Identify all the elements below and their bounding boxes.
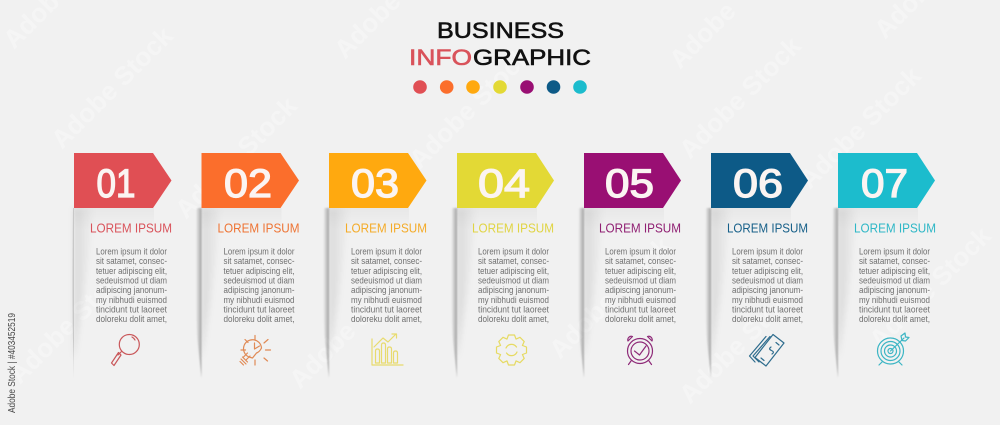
title: BUSINESS (437, 18, 564, 43)
body text 04: my nibhudi euismod (478, 295, 549, 306)
body text 07: Lorem ipsum it dolor (859, 246, 930, 258)
body text 05 (605, 246, 676, 325)
heading 01: LOREM IPSUM (90, 220, 172, 236)
title: GRAPHIC (473, 45, 591, 70)
icon: gear (496, 335, 526, 365)
body text 07: sit satamet, consec- (859, 256, 930, 267)
panel: step 03 (323, 153, 427, 378)
body text 02: my nibhudi euismod (224, 295, 294, 306)
heading 04: LOREM IPSUM (472, 220, 554, 236)
body text 04: tetuer adipiscing elit, (478, 266, 549, 277)
body text 06: sedeuismod ut diam (732, 276, 803, 286)
body text 06 (732, 246, 803, 325)
body text 04: sedeuismod ut diam (478, 276, 549, 286)
body text 03: sedeuismod ut diam (351, 276, 422, 286)
heading 02: LOREM IPSUM (218, 220, 300, 236)
title: INFO (409, 45, 472, 70)
watermark pattern: Adobe Stock (283, 260, 417, 394)
panel: step 01 (72, 153, 172, 378)
heading 05: LOREM IPSUM (599, 220, 681, 236)
heading 06: LOREM IPSUM (727, 220, 808, 236)
body text 05: tincidunt tut laoreet (605, 304, 676, 316)
body text 07: tetuer adipiscing elit, (859, 266, 930, 277)
number 04: 04 (478, 162, 530, 206)
body text 04: sit satamet, consec- (478, 256, 549, 267)
flag 01 (74, 153, 172, 208)
body text 07: tincidunt tut laoreet (859, 304, 930, 316)
body text 01: my nibhudi euismod (96, 295, 167, 306)
body text 03: sit satamet, consec- (351, 256, 422, 267)
body text 04: tincidunt tut laoreet (478, 304, 549, 316)
icon: bar chart with arrow (372, 334, 403, 365)
body text 02: tincidunt tut laoreet (224, 304, 295, 316)
body text 02: tetuer adipiscing elit, (224, 266, 294, 277)
title (409, 18, 591, 70)
body text 04: Lorem ipsum it dolor (478, 246, 549, 258)
flag 06 (711, 153, 808, 208)
body text 05: my nibhudi euismod (605, 295, 676, 306)
flag 02 (202, 153, 299, 208)
number 03: 03 (351, 162, 399, 206)
body text 07 (859, 246, 930, 325)
body text 03: tincidunt tut laoreet (351, 304, 422, 316)
colour dots (413, 80, 587, 94)
body text 03: adipiscing janonum- (351, 285, 422, 296)
body text 01 (96, 246, 167, 325)
watermark pattern: Adobe Stock (793, 60, 927, 194)
flag 05 (584, 153, 681, 208)
body text 06: tincidunt tut laoreet (732, 304, 803, 316)
icon: target with arrow (878, 333, 909, 365)
body text 06: my nibhudi euismod (732, 295, 803, 306)
icon: magnifier (112, 334, 139, 366)
flag 04 (457, 153, 554, 208)
icon: light bulb (240, 336, 270, 365)
body text 07: sedeuismod ut diam (859, 276, 930, 286)
panel: step 02 (196, 153, 300, 378)
number 02: 02 (224, 162, 272, 206)
watermark pattern: Adobe Stock (45, 20, 179, 154)
body text 03: my nibhudi euismod (351, 295, 422, 306)
body text 05: doloreku dolit amet, (605, 314, 676, 325)
body text 04: doloreku dolit amet, (478, 314, 549, 325)
number 05: 05 (605, 162, 654, 206)
body text 01: sit satamet, consec- (96, 256, 167, 267)
body text 05: adipiscing janonum- (605, 285, 676, 296)
stock id side label: Adobe Stock | #403452519 (7, 313, 18, 413)
body text 01: tincidunt tut laoreet (96, 304, 167, 316)
body text 05: sedeuismod ut diam (605, 276, 676, 286)
watermark pattern: Adobe Stock (673, 30, 807, 164)
body text 02: sedeuismod ut diam (224, 276, 295, 286)
number 06: 06 (733, 162, 783, 206)
body text 06: tetuer adipiscing elit, (732, 266, 803, 277)
heading 03: LOREM IPSUM (345, 220, 427, 236)
body text 03: Lorem ipsum it dolor (351, 246, 422, 258)
panel: step 05 (578, 153, 681, 378)
panel: step 07 (832, 153, 936, 378)
watermark pattern: Adobe Stock (863, 220, 997, 354)
icon: banknotes (750, 334, 784, 366)
watermark pattern: Adobe Stock (673, 275, 807, 409)
panel: step 06 (705, 153, 808, 378)
body text 04: adipiscing janonum- (478, 285, 549, 296)
body text 07: adipiscing janonum- (859, 285, 930, 296)
body text 06: sit satamet, consec- (732, 256, 803, 267)
panel: step 04 (451, 153, 554, 378)
body text 06: Lorem ipsum it dolor (732, 246, 803, 258)
body text 07: doloreku dolit amet, (859, 314, 930, 325)
body text 05: Lorem ipsum it dolor (605, 246, 676, 258)
body text 02: doloreku dolit amet, (224, 314, 294, 325)
body text 05: tetuer adipiscing elit, (605, 266, 676, 277)
body text 07: my nibhudi euismod (859, 295, 930, 306)
body text 06: adipiscing janonum- (732, 285, 803, 296)
body text 01: tetuer adipiscing elit, (96, 266, 167, 277)
body text 03: tetuer adipiscing elit, (351, 266, 422, 277)
body text 06: doloreku dolit amet, (732, 314, 803, 325)
watermark pattern: Adobe Stock (169, 90, 303, 224)
flag 03 (329, 153, 426, 208)
body text 01: doloreku dolit amet, (96, 314, 167, 325)
body text 02: sit satamet, consec- (224, 256, 294, 267)
body text 02 (224, 246, 295, 325)
body text 05: sit satamet, consec- (605, 256, 676, 267)
watermark pattern: Adobe Stock (543, 230, 677, 364)
heading 07: LOREM IPSUM (854, 220, 936, 236)
body text 03: doloreku dolit amet, (351, 314, 422, 325)
watermark pattern: Adobe Stock (403, 40, 537, 174)
number 07: 07 (861, 162, 908, 206)
body text 02: adipiscing janonum- (224, 285, 294, 296)
body text 04 (478, 246, 549, 325)
body text 01: Lorem ipsum it dolor (96, 246, 167, 258)
icon: alarm clock (628, 336, 652, 364)
watermark pattern: Adobe Stock (3, 255, 137, 389)
body text 01: adipiscing janonum- (96, 285, 167, 296)
number 01: 01 (96, 162, 136, 206)
body text 01: sedeuismod ut diam (96, 276, 167, 286)
body text 03 (351, 246, 422, 325)
flag 07 (838, 153, 935, 208)
body text 02: Lorem ipsum it dolor (224, 246, 294, 258)
